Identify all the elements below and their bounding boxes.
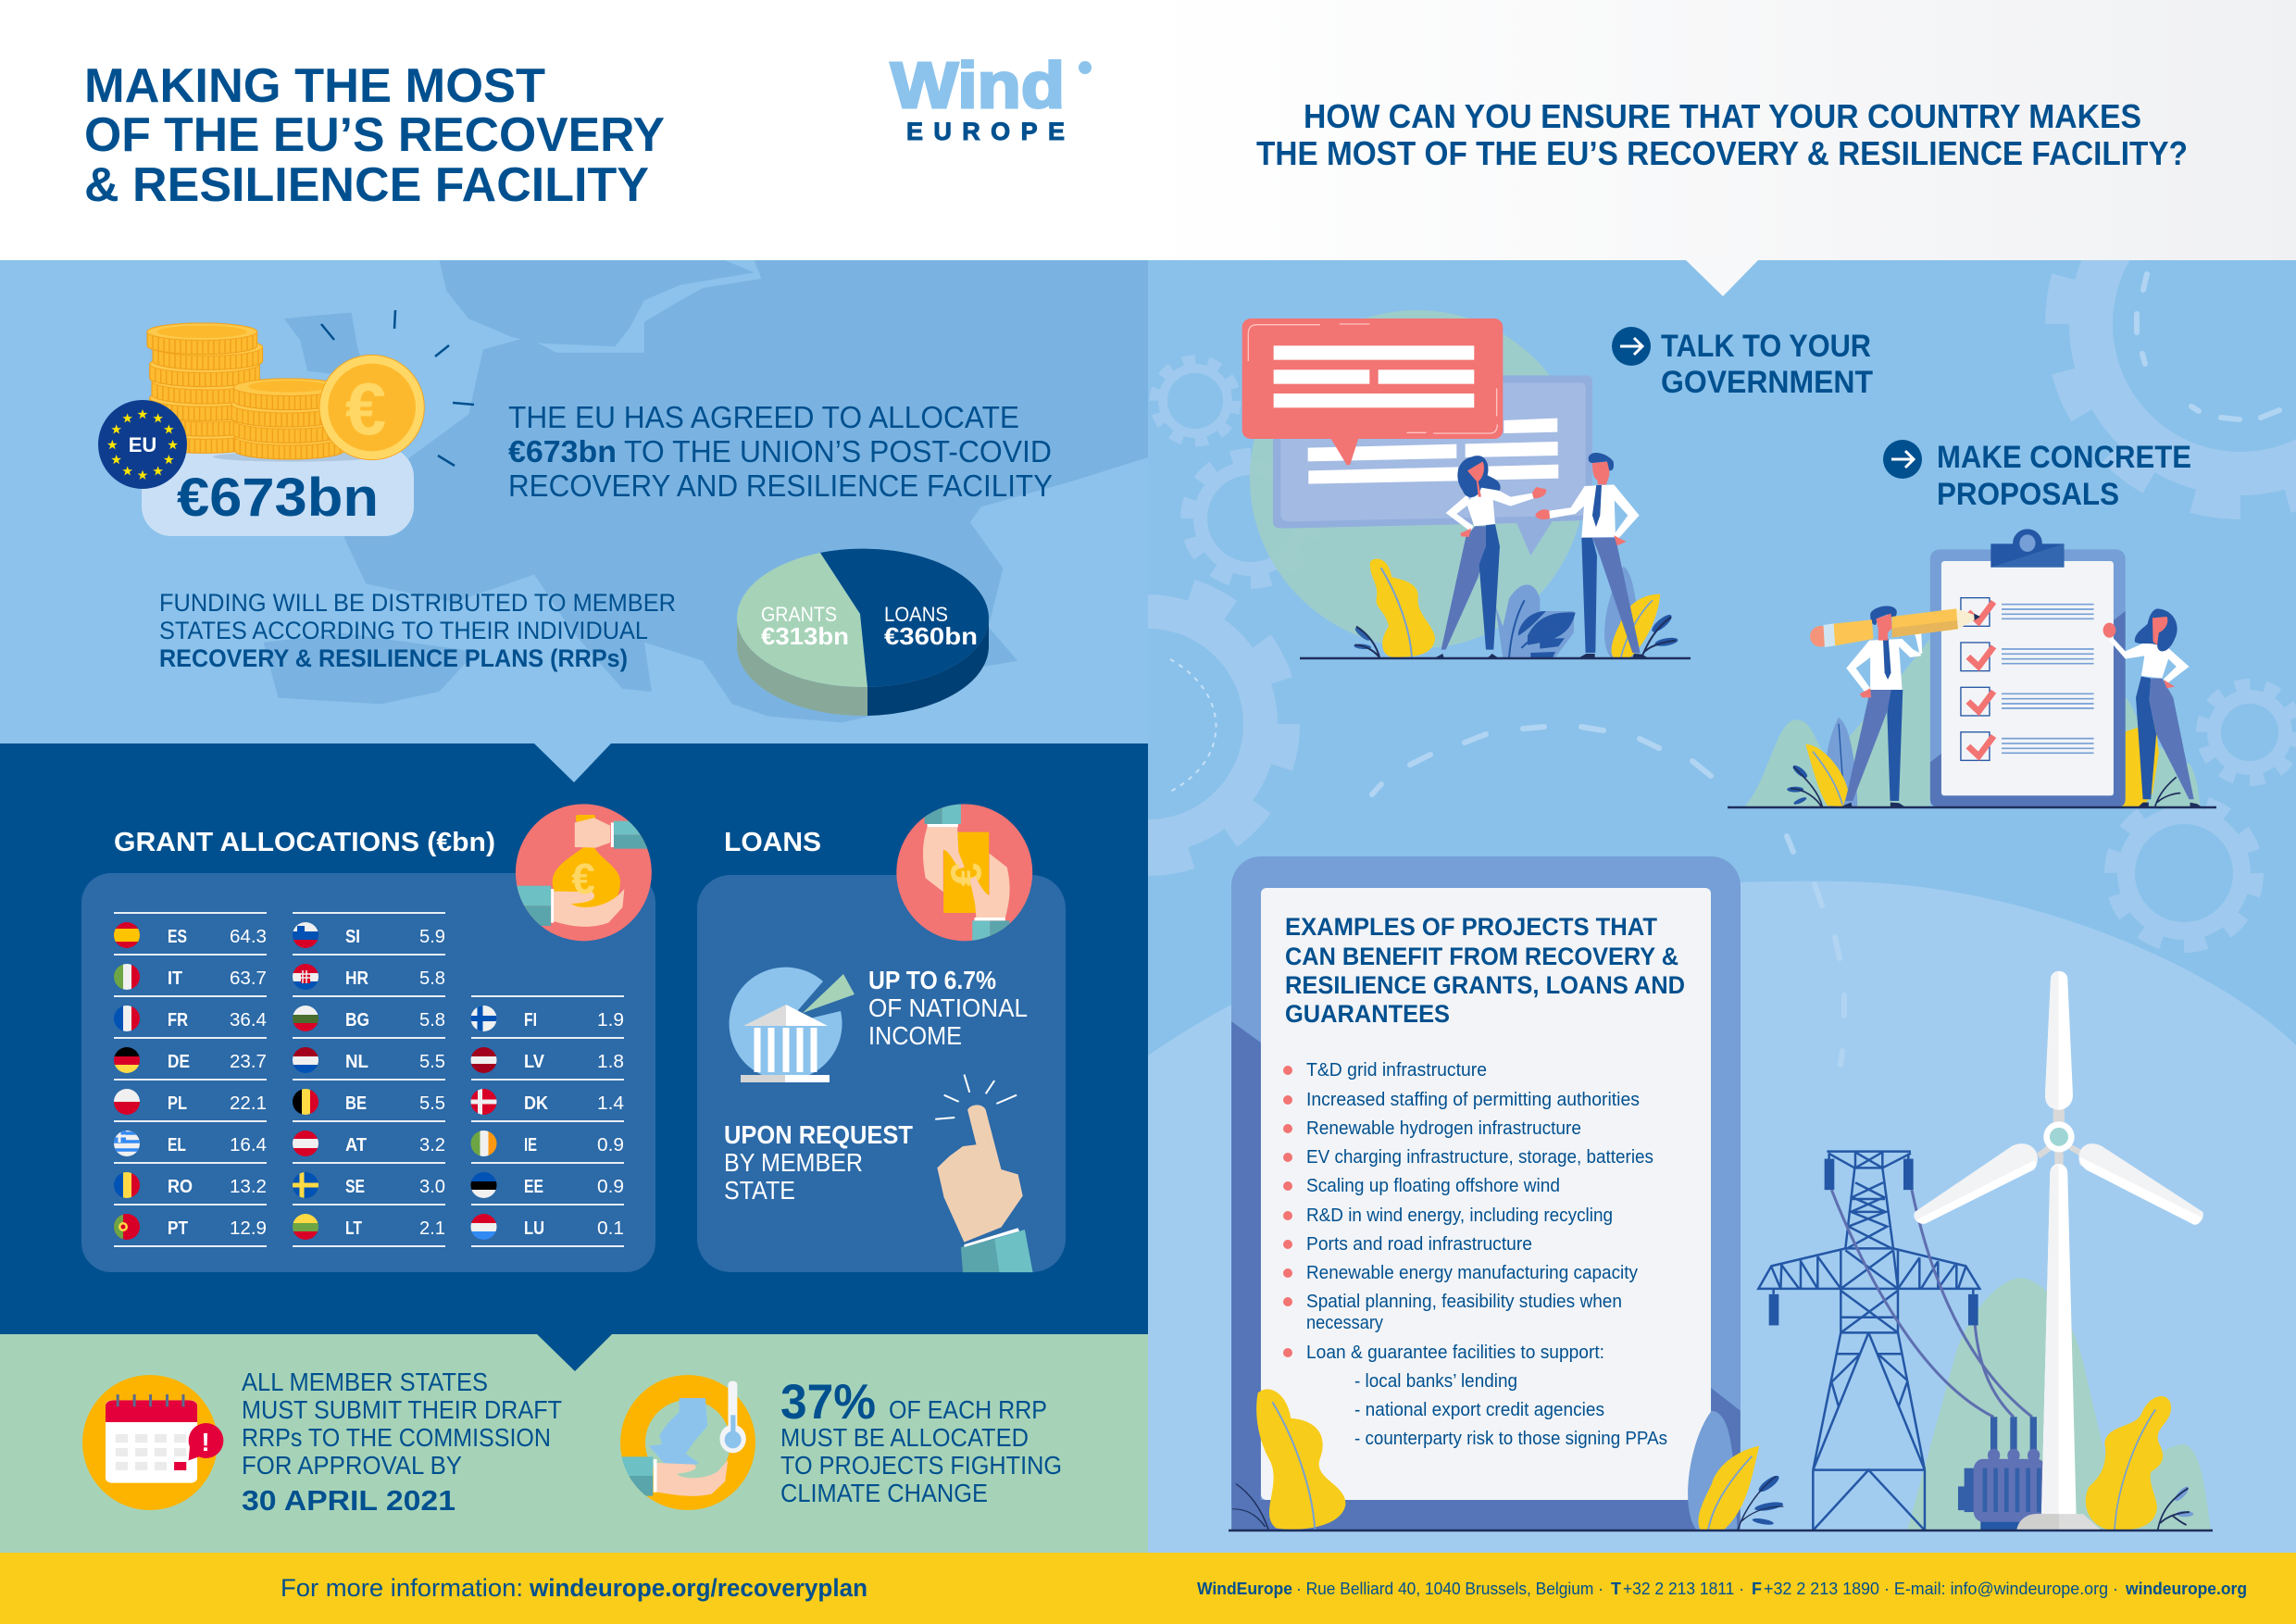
text: 37% climate: 37% [780, 1375, 876, 1430]
bullet list of projects: - national export credit agencies [1354, 1400, 1604, 1420]
row: ES: ES [168, 927, 187, 947]
footer: more information link: For more information: [281, 1574, 523, 1602]
value pill [142, 447, 414, 536]
title [84, 59, 665, 212]
title: & RESILIENCE FACILITY [84, 158, 649, 212]
text: up to 6.7%: UP TO 6.7% [868, 966, 996, 994]
text: submission deadline: MUST SUBMIT THEIR DRAFT [242, 1395, 562, 1424]
text: EU allocation: €673bn [508, 434, 617, 468]
step: talk to your government [1612, 327, 1873, 400]
text: EU allocation: TO THE UNION’S POST-COVID [624, 434, 1052, 468]
row: IT: 63.7 [230, 968, 267, 989]
illustration: wind turbine, pylon and transformer [1758, 971, 2211, 1530]
row: LV: 1.8 [597, 1052, 624, 1072]
footer: contact details: +32 2 213 1811 · [1623, 1580, 1744, 1598]
row: LV: LV [524, 1052, 545, 1072]
row: PL [114, 1089, 267, 1115]
row: NL: NL [345, 1052, 368, 1072]
step: make concrete proposals: MAKE CONCRETE [1937, 440, 2191, 475]
row: FR [114, 1006, 267, 1031]
icon: calendar: ! [201, 1428, 210, 1456]
row: FI [470, 1006, 624, 1031]
row: IT: IT [168, 968, 182, 989]
row: SE: 3.0 [419, 1177, 445, 1197]
row: NL [293, 1047, 445, 1073]
heading: examples of projects: GUARANTEES [1285, 1000, 1450, 1028]
text: funding distribution: RECOVERY & RESILIENCE PLANS (RRPs) [159, 644, 628, 672]
row: PT: 12.9 [230, 1218, 267, 1239]
card: grant table [81, 873, 655, 1272]
EU badge: EU [129, 433, 156, 456]
row: RO: RO [168, 1177, 193, 1197]
step: talk to your government: GOVERNMENT [1661, 365, 1873, 400]
text: EU allocation: RECOVERY AND RESILIENCE FACILITY [508, 468, 1053, 503]
panel: EU allocation [0, 260, 1148, 743]
row: DE: 23.7 [230, 1052, 267, 1072]
illustration: conversation [1242, 310, 1678, 659]
logo: WindEurope [891, 49, 1092, 145]
row: LU [470, 1214, 624, 1240]
woman [1441, 526, 1486, 650]
row: EE [470, 1172, 624, 1198]
text: 37% climate: TO PROJECTS FIGHTING [780, 1451, 1062, 1480]
text: up to 6.7%: OF NATIONAL [868, 993, 1028, 1022]
text: 37% climate: MUST BE ALLOCATED [780, 1423, 1029, 1452]
footer: more information link: windeurope.org/recoveryplan [529, 1574, 867, 1602]
card: loans [697, 875, 1066, 1272]
text: upon request: BY MEMBER [724, 1148, 863, 1177]
row: FR: 36.4 [230, 1010, 267, 1031]
row: FR: FR [168, 1010, 188, 1031]
illustration: coins with EU badge [98, 310, 474, 536]
pie chart: grants vs loans: LOANS [884, 603, 948, 626]
footer: more information link [281, 1574, 867, 1602]
bullet list of projects [1283, 1060, 1667, 1449]
row: DK: 1.4 [597, 1093, 624, 1114]
coin stacks [147, 323, 424, 462]
row: FI: 1.9 [597, 1010, 624, 1031]
row: EL [114, 1131, 267, 1156]
footer: contact details [1197, 1580, 2247, 1598]
icon: money bag exchange [513, 804, 653, 941]
question heading: THE MOST OF THE EU’S RECOVERY & RESILIENCE FACILITY? [1256, 134, 2188, 172]
row: EE: 0.9 [597, 1177, 624, 1197]
value pill: €673bn [177, 468, 379, 528]
map of Europe background [264, 260, 1148, 722]
row: IT [114, 964, 267, 990]
row: SE: SE [345, 1177, 365, 1197]
row: SI: 5.9 [419, 927, 445, 947]
row: IE: 0.9 [597, 1135, 624, 1156]
row: LT: 2.1 [419, 1218, 445, 1239]
heading: grant allocations: GRANT ALLOCATIONS (€bn) [114, 828, 495, 857]
footer: contact details: · Rue Belliard 40, 1040 Brussels, Belgium · [1296, 1580, 1603, 1598]
text: EU allocation [508, 400, 1053, 503]
panel: how to act [1148, 260, 2296, 1553]
woman with hand raised [2136, 677, 2156, 799]
row: RO: 13.2 [230, 1177, 267, 1197]
text: up to 6.7% [868, 966, 1028, 1050]
text: funding distribution: STATES ACCORDING TO THEIR INDIVIDUAL [159, 617, 648, 644]
text: upon request: STATE [724, 1176, 795, 1205]
step: make concrete proposals [1883, 440, 2191, 512]
text: upon request [724, 1120, 913, 1205]
EU badge [98, 400, 187, 489]
pie chart: grants vs loans: GRANTS [761, 603, 837, 626]
header band [0, 0, 2296, 260]
footer band [0, 1553, 2296, 1624]
row: BG [293, 1006, 445, 1031]
step: make concrete proposals: PROPOSALS [1937, 477, 2119, 512]
row: BG: BG [345, 1010, 369, 1031]
row: HR: 5.8 [419, 968, 445, 989]
row: LU: 0.1 [597, 1218, 624, 1239]
sparkle lines [321, 310, 474, 466]
text: EU allocation: THE EU HAS AGREED TO ALLOCATE [508, 400, 1019, 434]
row: ES [114, 922, 267, 948]
row: PL: 22.1 [230, 1093, 267, 1114]
footer: contact details: F [1752, 1580, 1762, 1598]
row: BG: 5.8 [419, 1010, 445, 1031]
row: AT [293, 1131, 445, 1156]
text: submission deadline [242, 1368, 562, 1517]
pie chart: grants vs loans: €313bn [761, 622, 849, 650]
row: DK: DK [524, 1093, 548, 1114]
heading: examples of projects [1285, 913, 1685, 1028]
man [1581, 538, 1597, 653]
heading: examples of projects: RESILIENCE GRANTS, LOANS AND [1285, 971, 1685, 999]
pie chart: grants vs loans [737, 549, 989, 716]
bullet list of projects: Renewable hydrogen infrastructure [1306, 1118, 1581, 1139]
text: 37% climate: CLIMATE CHANGE [780, 1479, 988, 1507]
row: DE [114, 1047, 267, 1073]
bullet list of projects: - counterparty risk to those signing PPAs [1354, 1429, 1667, 1449]
bullet list of projects: Ports and road infrastructure [1306, 1234, 1532, 1255]
row: BE: 5.5 [419, 1093, 445, 1114]
illustration: checklist [1744, 529, 2202, 807]
text: submission deadline: 30 APRIL 2021 [242, 1484, 455, 1517]
row: LU: LU [524, 1218, 544, 1239]
question heading: HOW CAN YOU ENSURE THAT YOUR COUNTRY MAKES [1304, 97, 2141, 135]
row: BE [293, 1089, 445, 1115]
row: RO [114, 1172, 267, 1198]
bullet list of projects: R&D in wind energy, including recycling [1306, 1206, 1613, 1226]
bullet list of projects: necessary [1306, 1313, 1383, 1333]
logo: WindEurope: EUROPE [906, 118, 1065, 145]
question heading [1256, 97, 2188, 172]
row: BE: BE [345, 1093, 367, 1114]
row: PT: PT [168, 1218, 188, 1239]
bullet list of projects: Spatial planning, feasibility studies when [1306, 1292, 1622, 1312]
row: AT: AT [345, 1135, 367, 1156]
row: IE: IE [524, 1135, 537, 1156]
row: PT [114, 1214, 267, 1240]
text: submission deadline: FOR APPROVAL BY [242, 1451, 462, 1480]
text: up to 6.7%: INCOME [868, 1021, 962, 1050]
text: submission deadline: ALL MEMBER STATES [242, 1368, 488, 1396]
panel: deadlines and climate [0, 1334, 1148, 1553]
bullet list of projects: Renewable energy manufacturing capacity [1306, 1263, 1638, 1283]
row: DK [470, 1089, 624, 1115]
euro sign on coin: € [345, 368, 386, 450]
row: EL: EL [168, 1135, 186, 1156]
row: LV [470, 1047, 624, 1073]
ground line: conversation [1300, 657, 1691, 659]
text: submission deadline: RRPs TO THE COMMISSION [242, 1423, 551, 1452]
text: funding distribution [159, 589, 676, 672]
row: SI [293, 922, 445, 948]
row: SE [293, 1172, 445, 1198]
plant right of turbine [2086, 1396, 2171, 1530]
footer: contact details: +32 2 213 1890 · E-mail: info@windeurope.org · [1764, 1580, 2118, 1598]
row: PL: PL [168, 1093, 187, 1114]
title: MAKING THE MOST [84, 59, 545, 113]
heading: loans: LOANS [724, 828, 821, 857]
row: ES: 64.3 [230, 927, 267, 947]
man with pencil [1845, 690, 1891, 801]
icon: calendar [82, 1375, 223, 1510]
row: AT: 3.2 [419, 1135, 445, 1156]
bullet list of projects: Increased staffing of permitting authorities [1306, 1090, 1640, 1110]
bullet list of projects: Loan & guarantee facilities to support: [1306, 1343, 1604, 1363]
ground line: checklist [1728, 806, 2216, 808]
row: SI: SI [345, 927, 360, 947]
turbine [2053, 1109, 2065, 1166]
text: 37% climate: OF EACH RRP [889, 1395, 1047, 1424]
row: HR: HR [345, 968, 368, 989]
icon: bank with income share [730, 968, 855, 1082]
icon: money bag exchange: € [571, 855, 595, 903]
clipboard [1930, 549, 2126, 807]
title: OF THE EU’S RECOVERY [84, 108, 665, 162]
logo: WindEurope: Wind [891, 49, 1065, 121]
icon: banknote handover: € [942, 863, 991, 886]
panel: grants and loans [0, 743, 1148, 1334]
icon: banknote handover [896, 803, 1032, 943]
row: DE: DE [168, 1052, 190, 1072]
bullet list of projects: Scaling up floating offshore wind [1306, 1176, 1560, 1196]
ground line: turbine [1229, 1530, 2213, 1531]
panel: project examples card [1231, 856, 1784, 1530]
heading: examples of projects: CAN BENEFIT FROM RECOVERY & [1285, 943, 1678, 970]
bullet list of projects: - local banks’ lending [1354, 1371, 1517, 1392]
row: FI: FI [524, 1010, 537, 1031]
icon: pointing hand [935, 1075, 1033, 1272]
heading: examples of projects: EXAMPLES OF PROJECTS THAT [1285, 913, 1657, 941]
pie chart: grants vs loans: €360bn [884, 622, 978, 650]
text: 37% climate [780, 1375, 1062, 1507]
plants at card base [1232, 1389, 1784, 1530]
step: talk to your government: TALK TO YOUR [1661, 329, 1871, 364]
row: LT: LT [345, 1218, 362, 1239]
text: upon request: UPON REQUEST [724, 1120, 913, 1149]
text: funding distribution: FUNDING WILL BE DISTRIBUTED TO MEMBER [159, 589, 676, 617]
decorative gears and hill [1148, 260, 2296, 1553]
row: HR [293, 964, 445, 990]
icon: earth in hand with thermometer [616, 1375, 755, 1510]
row: NL: 5.5 [419, 1052, 445, 1072]
bullet list of projects: T&D grid infrastructure [1306, 1060, 1487, 1081]
bullet list of projects: EV charging infrastructure, storage, batteries [1306, 1147, 1653, 1168]
row: IE [470, 1131, 624, 1156]
row: EL: 16.4 [230, 1135, 267, 1156]
footer: contact details: windeurope.org [2125, 1580, 2247, 1598]
row: EE: EE [524, 1177, 543, 1197]
footer: contact details: T [1611, 1580, 1621, 1598]
row: LT [293, 1214, 445, 1240]
footer: contact details: WindEurope [1197, 1580, 1292, 1598]
